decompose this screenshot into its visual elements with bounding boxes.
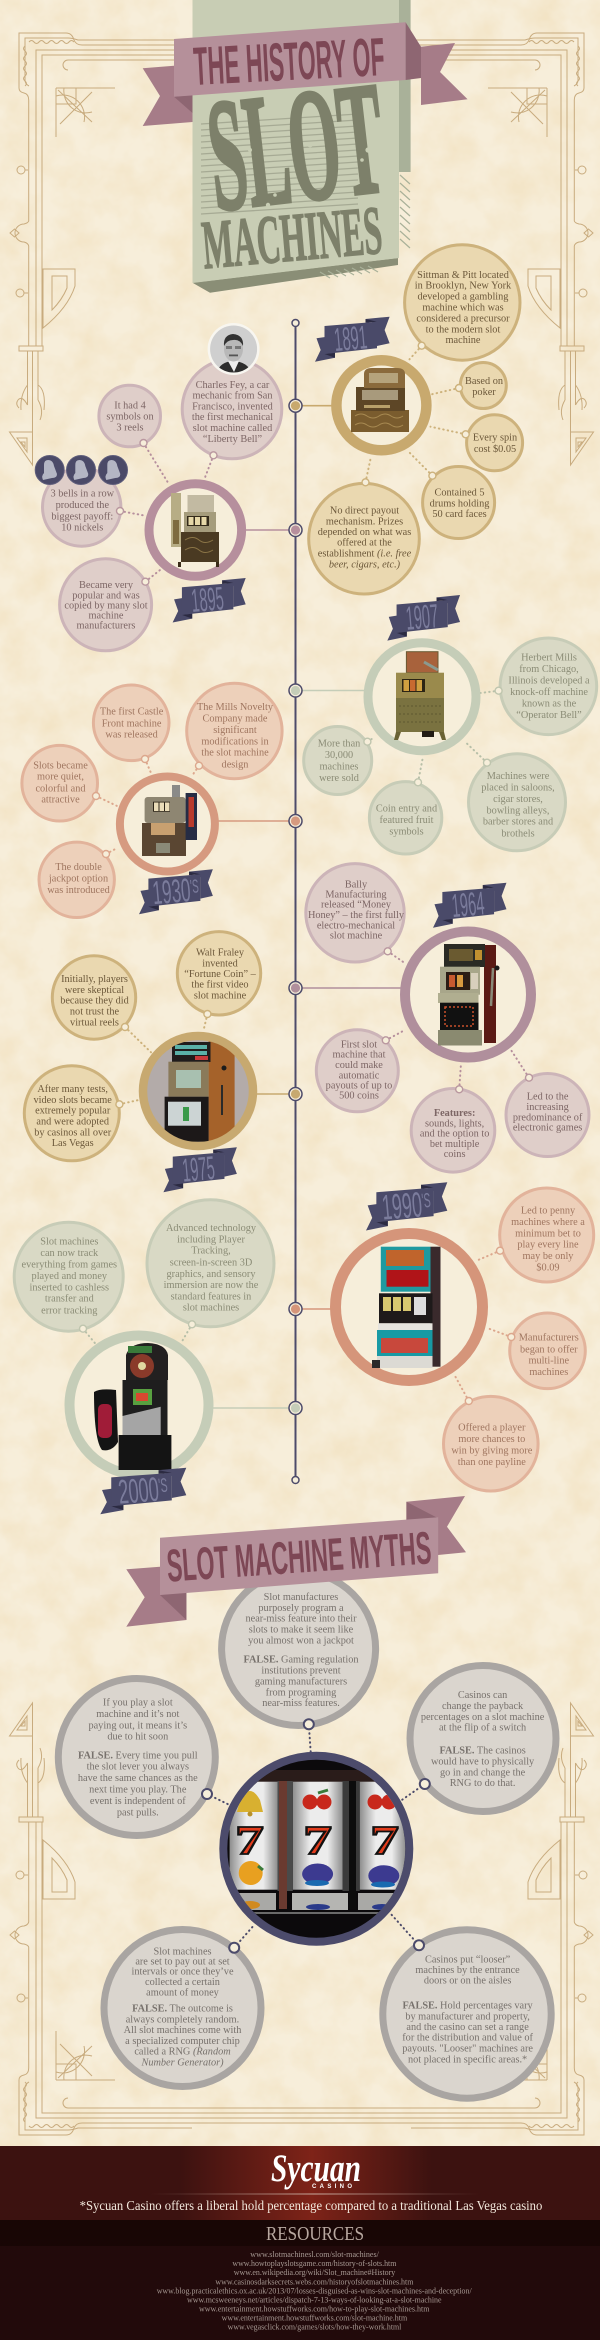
year ribbon 1891: 1891	[332, 318, 369, 358]
text: sevens	[237, 1826, 399, 1855]
bubble: features: sounds, lights,	[425, 1118, 484, 1129]
bubble: three bells: 3 bells in a row	[51, 489, 115, 500]
bubble: advanced technology: graphics, and sensory	[167, 1269, 256, 1280]
bubble: saloons	[465, 742, 566, 851]
bubble: castle front	[93, 685, 169, 773]
era 1930s	[22, 683, 302, 918]
bubble: Mills Novelty: the slot machine	[201, 748, 269, 759]
bubble: coin entry: Coin entry and	[376, 804, 438, 815]
bubble: contained 5 drums: drums holding	[430, 498, 489, 509]
myth bubble: flip of a switch: Casinos can	[458, 1690, 507, 1701]
bubble: Bally: slot machine	[330, 931, 383, 942]
text: sevens: 7	[370, 1818, 399, 1863]
bubble: after many tests: and were adopted	[36, 1117, 110, 1128]
year ribbon 1990s: 'S	[421, 1189, 432, 1213]
bubble: double jackpot	[39, 842, 117, 918]
myth bubble: near-miss: near-miss features.	[262, 1698, 340, 1709]
main ring 1964 with machine	[405, 932, 531, 1058]
myth bubble: flip of a switch: at the flip of a switch	[439, 1723, 527, 1734]
bubble: saloons: brothels	[501, 828, 535, 839]
bubble: more quiet: attractive	[41, 795, 80, 806]
main ring 1990s with machine	[336, 1234, 482, 1380]
bubble: very popular: popular and was	[72, 590, 140, 601]
bubble: Walt Fraley: slot machine	[194, 991, 247, 1002]
bubble: first automatic payouts: automatic	[339, 1070, 380, 1081]
resource list: www.entertainment.howstuffworks.com/slot-machine.htm	[222, 2312, 407, 2322]
bubble: 30,000 machines: 30,000	[325, 750, 353, 761]
bubble: contained 5 drums: Contained 5	[434, 487, 485, 498]
bubble: track everything: can now track	[40, 1248, 99, 1259]
myth bubble: near-miss: Slot manufactures	[264, 1592, 338, 1603]
resource list: www.howtoplayslotsgame.com/history-of-slots.htm	[232, 2258, 397, 2268]
era 1895	[35, 323, 302, 651]
myth bubble: set intervals	[104, 1926, 261, 2086]
logo: Sycuan Casino: Sycuan	[271, 2147, 361, 2190]
main ring 1975 with machine	[143, 1036, 253, 1146]
bubble: penny machines: may be only	[523, 1251, 574, 1262]
bubble: saloons: barber stores and	[483, 817, 554, 828]
bubble: electronic games: increasing	[526, 1102, 569, 1113]
bubble: Bally: Manufacturing	[325, 890, 387, 901]
myth bubble: near-miss: FALSE. Gaming regulation	[243, 1655, 359, 1666]
bubble: penny machines: play every line	[517, 1240, 579, 1251]
bubble: advanced technology: Advanced technology	[166, 1223, 257, 1234]
bubble: saloons: Machines were	[487, 771, 550, 782]
bubble: three bells: 10 nickels	[61, 522, 103, 533]
year ribbon 1990s	[366, 1182, 447, 1230]
bubble: every spin: cost $0.05	[474, 444, 516, 455]
bubble: after many tests: video slots became	[34, 1095, 112, 1106]
resource list: www.slotmachinesl.com/slot-machines/	[250, 2249, 379, 2259]
year ribbon 2000s	[100, 1468, 186, 1514]
portrait: Charles Fey	[208, 323, 260, 376]
main ring 1891 with machine	[336, 360, 426, 450]
bubble: four symbols: symbols on	[106, 412, 154, 423]
footnote: *Sycuan Casino offers a liberal hold percentage compared to a traditional Las Vegas casino	[80, 2199, 542, 2214]
bubble: more quiet: more quiet,	[37, 772, 84, 783]
bubble: double jackpot: jackpot option	[48, 874, 108, 885]
year ribbon 1930s: 'S	[189, 876, 200, 898]
bubble: more quiet	[22, 745, 119, 821]
connector 1907	[289, 684, 366, 697]
footer: sycuan band	[0, 2146, 600, 2220]
myth bubble: flip of a switch: RNG to do that.	[450, 1778, 515, 1789]
bubble: three bells	[42, 468, 145, 546]
connector 1975	[252, 1088, 302, 1100]
bubble: advanced technology: slot machines	[183, 1303, 239, 1314]
bubble: very popular: machine	[89, 611, 124, 622]
bubble: after many tests: Las Vegas	[52, 1138, 94, 1149]
resource list	[157, 2249, 472, 2331]
bubble: 30,000 machines	[304, 726, 375, 794]
bubble: Herbert Mills: “Operator Bell”	[516, 710, 582, 721]
bubble: Charles Fey: the first mechanical	[192, 412, 273, 423]
myth bubble: due to hit: paying out, it means it’s	[88, 1720, 187, 1731]
bubble: Charles Fey: Francisco, invented	[192, 401, 274, 412]
era 1964	[289, 864, 589, 1172]
bubble: very popular: Became very	[79, 580, 134, 591]
bubble: electronic games: Led to the	[527, 1092, 569, 1103]
bubble: no direct payout: No direct payout	[330, 506, 399, 517]
myth bubble: flip of a switch: percentages on a slot machine	[421, 1712, 545, 1723]
myth bubble: set intervals: are set to pay out at set	[135, 1957, 230, 1968]
bubble: penny machines: $0.09	[536, 1262, 560, 1273]
main ring 1930s with machine	[120, 776, 215, 872]
bubble: advanced technology: screen-in-screen 3D	[170, 1257, 253, 1268]
bubble: skeptical	[52, 956, 151, 1052]
bubble: castle front: Front machine	[102, 718, 162, 729]
year ribbon 1964: 1964	[450, 884, 486, 924]
resource list: www.blog.practicalethics.ox.ac.uk/2013/07/losses-disguised-as-wins-slot-machines-and-deception/	[157, 2285, 472, 2295]
bubble: multi-line: Manufacturers	[519, 1333, 579, 1344]
resource list: www.entertainment.howstuffworks.com/how-to-play-slot-machines.htm	[199, 2303, 430, 2313]
bubble: skeptical: Initially, players	[61, 974, 128, 985]
bubble: four symbols	[99, 385, 168, 483]
bubble: features: and the option to	[420, 1129, 489, 1140]
myth bubble: set intervals: a specialized computer chip	[125, 2036, 240, 2047]
year ribbon 1964	[433, 883, 506, 928]
myth bubble: set intervals: Number Generator)	[140, 2057, 224, 2068]
myth bubble: due to hit: due to hit soon	[107, 1732, 168, 1743]
bubble: three bells: produced the	[56, 500, 109, 511]
center image: slot reels	[215, 1756, 420, 1942]
connector 1990s	[289, 1302, 332, 1316]
bubble: after many tests	[24, 1066, 138, 1161]
icons: three bells	[35, 456, 128, 484]
bubble: no direct payout: establishment (i.e. free	[318, 549, 411, 560]
bubble: double jackpot: was introduced	[47, 885, 111, 896]
bubble: first automatic payouts	[316, 1030, 405, 1112]
bubble: first automatic payouts: could make	[335, 1060, 383, 1071]
myth bubble: due to hit: next time you play. The	[89, 1784, 187, 1795]
year ribbon 2000s: 2000	[116, 1466, 205, 1511]
myth bubble: near-miss	[222, 1572, 376, 1752]
bubble: based on poker: Based on	[465, 376, 503, 387]
bubble: multi-line: machines	[529, 1367, 568, 1378]
bubble: no direct payout: mechanism. Prizes	[326, 516, 403, 527]
year ribbon 1891	[315, 317, 390, 362]
bubble: more chances: than one payline	[458, 1457, 526, 1468]
bubble: Charles Fey: Charles Fey, a car	[196, 380, 270, 391]
myth bubble: set intervals: intervals or once they’ve	[131, 1967, 234, 1978]
bubble: electronic games: predominance of	[513, 1112, 583, 1123]
bubble: Herbert Mills	[480, 638, 597, 735]
bubble: Sittman & Pitt: considered a precursor	[416, 314, 510, 325]
myth bubble: flip of a switch: change the payback	[442, 1701, 524, 1712]
myth bubble: set intervals: always completely random.	[126, 2014, 239, 2025]
bubble: very popular: manufacturers	[77, 621, 135, 632]
bubble: advanced technology: immersion are now the	[164, 1280, 259, 1291]
bubble: no direct payout: offered at the	[337, 538, 392, 549]
myth bubble: due to hit: event is independent of	[90, 1796, 186, 1807]
myth bubble: looser machines: payouts. "Looser" machines are	[402, 2044, 533, 2055]
myth bubble: set intervals: collected a certain	[145, 1977, 220, 1988]
myth bubble: set intervals: amount of money	[146, 1987, 220, 1998]
bubble: Mills Novelty: significant	[213, 725, 257, 736]
bubble: track everything: played and money	[32, 1271, 108, 1282]
bubble: Walt Fraley	[177, 932, 261, 1030]
bubble: track everything: transfer and	[45, 1294, 95, 1305]
myths ribbon heading	[126, 1496, 466, 1627]
myth bubble: set intervals: Slot machines	[153, 1946, 212, 1957]
bubble: more quiet: Slots became	[33, 760, 88, 771]
era 1990s	[289, 1182, 594, 1491]
title block	[192, 0, 411, 293]
bubble: track everything: error tracking	[41, 1305, 97, 1316]
connector 2000s	[210, 1402, 302, 1414]
bubble: contained 5 drums	[408, 451, 495, 538]
year ribbon 1907	[387, 595, 460, 641]
bubble: Herbert Mills: Herbert Mills	[521, 653, 577, 664]
bubble: Sittman & Pitt: developed a gambling	[418, 292, 508, 303]
bubble: multi-line: multi-line	[528, 1356, 570, 1367]
myth bubble: near-miss: near-miss feature into their	[245, 1614, 357, 1625]
bubble: Bally: Bally	[345, 880, 368, 891]
bubble: coin entry: symbols	[389, 827, 424, 838]
bubble: saloons: placed in saloons,	[481, 783, 555, 794]
bubble: Bally: released “Money	[321, 900, 392, 911]
era 1891	[289, 245, 523, 594]
bubble: more chances: win by giving more	[451, 1446, 533, 1457]
bubble: no direct payout: depended on what was	[318, 527, 411, 538]
year ribbon 1930s: 1930	[151, 868, 226, 911]
era 1975	[24, 932, 302, 1192]
myth bubble: due to hit	[58, 1678, 230, 1836]
resource list: www.en.wikipedia.org/wiki/Slot_machine#History	[234, 2267, 396, 2277]
connector 1930s	[215, 814, 302, 828]
text: sevens: 7	[235, 1818, 264, 1863]
myth bubble: looser machines: doors or on the aisles	[424, 1975, 511, 1986]
bubble: saloons: cigar stores,	[493, 794, 543, 805]
bubble: Walt Fraley: the first video	[191, 980, 249, 991]
myth bubble: due to hit: the slot lever you always	[87, 1762, 189, 1773]
bubble: after many tests: After many tests,	[37, 1084, 108, 1095]
myth bubble: looser machines: FALSE. Hold percentages vary	[402, 2001, 533, 2012]
bubble: Mills Novelty: The Mills Novelty	[197, 702, 274, 713]
myth bubble: due to hit: If you play a slot	[103, 1698, 173, 1709]
bubble: Charles Fey: mechanic from San	[192, 391, 273, 402]
bubble: first automatic payouts: payouts of up to	[326, 1081, 392, 1092]
resource list: www.mcsweeneys.net/articles/dispatch-7-13-ways-of-looking-at-a-slot-machine	[187, 2294, 442, 2304]
myth bubble: near-miss: purposely program a	[258, 1603, 344, 1614]
bubble: Sittman & Pitt: Sittman & Pitt located	[417, 270, 510, 281]
bubble: Charles Fey: slot machine called	[193, 423, 273, 434]
bubble: four symbols: It had 4	[114, 401, 146, 412]
year ribbon 2000s: 'S	[157, 1475, 169, 1497]
bubble: after many tests: by casinos all over	[34, 1127, 112, 1138]
bubble: more chances: Offered a player	[458, 1423, 526, 1434]
main ring 2000s with machine	[70, 1336, 208, 1474]
bubble: Charles Fey	[182, 359, 282, 478]
myth bubble: near-miss: from programing	[266, 1687, 336, 1698]
main ring 1895 with machine	[149, 484, 242, 576]
year ribbon 1990s: 1990	[380, 1181, 463, 1228]
myth bubble: due to hit: past pulls.	[117, 1808, 159, 1819]
heading: resources: RESOURCES	[266, 2223, 364, 2245]
bubble: first automatic payouts: First slot	[341, 1039, 377, 1050]
era 1907	[289, 595, 597, 854]
myth bubble: looser machines: by manufacturer and property,	[405, 2011, 530, 2022]
bubble: Mills Novelty: design	[222, 759, 248, 770]
bubble: track everything: inserted to cashless	[30, 1282, 109, 1293]
bubble: every spin: Every spin	[473, 432, 517, 443]
myth bubble: looser machines	[383, 1913, 551, 2098]
bubble: penny machines: Led to penny	[521, 1206, 576, 1217]
resource list: www.casinosdarksecrets.webs.com/historyofslotmachines.htm	[215, 2276, 414, 2286]
era 2000s	[14, 1200, 302, 1514]
bubble: advanced technology: Tracking,	[191, 1246, 231, 1257]
year ribbon 1975: 1975	[181, 1149, 216, 1189]
bubble: Mills Novelty	[187, 683, 282, 779]
bubble: track everything: Slot machines	[40, 1237, 98, 1248]
myth bubble: due to hit: FALSE. Every time you pull	[78, 1750, 198, 1761]
myth bubble: near-miss: gaming manufacturers	[255, 1677, 347, 1688]
bubble: track everything: everything from games	[22, 1260, 117, 1271]
myth bubble: near-miss: slots to make it seem like	[249, 1625, 354, 1636]
bubble: based on poker: poker	[472, 387, 496, 398]
myth bubble: due to hit: have the same chances as the	[78, 1773, 198, 1784]
myth bubble: flip of a switch	[402, 1666, 556, 1812]
bubble: three bells: biggest payoff:	[51, 512, 113, 523]
bubble: Sittman & Pitt	[405, 245, 520, 360]
bubble: based on poker	[432, 362, 506, 408]
bubble: Sittman & Pitt: machine which was	[422, 302, 504, 313]
bubble: electronic games	[506, 1050, 589, 1156]
myth bubble: looser machines: and the casino can set a range	[406, 2022, 529, 2033]
bubble: castle front: was released	[105, 730, 159, 741]
bubble: coin entry: featured fruit	[379, 815, 434, 826]
bubble: very popular: copied by many slot	[64, 600, 148, 611]
bubble: Walt Fraley: “Fortune Coin” –	[184, 969, 257, 980]
myth bubble: set intervals: called a RNG (Random	[134, 2047, 231, 2058]
myth bubble: set intervals: All slot machines come with	[124, 2025, 242, 2036]
bubble: features	[411, 1063, 495, 1172]
bubble: Mills Novelty: Company made	[203, 714, 268, 725]
bubble: 30,000 machines: were sold	[319, 773, 360, 784]
bubble: four symbols: 3 reels	[116, 422, 144, 433]
bubble: castle front: The first Castle	[100, 707, 164, 718]
bubble: first automatic payouts: machine that	[333, 1050, 386, 1061]
bubble: coin entry	[369, 757, 442, 854]
bubble: skeptical: virtual reels	[70, 1017, 119, 1028]
bubble: more chances	[444, 1377, 538, 1491]
bubble: multi-line: began to offer	[520, 1344, 578, 1355]
bubble: more quiet: colorful and	[35, 783, 86, 794]
bubble: features: bet multiple	[430, 1139, 480, 1150]
timeline axis	[292, 320, 299, 1484]
myth bubble: near-miss: institutions prevent	[261, 1665, 341, 1676]
bubble: skeptical: were skeptical	[65, 985, 124, 996]
bubble: double jackpot: The double	[55, 862, 102, 873]
main ring 1907 with machine	[368, 643, 476, 751]
title block: MACHINES	[199, 192, 385, 283]
bubble: every spin	[430, 415, 523, 471]
connector 1964	[289, 982, 402, 994]
bubble: electronic games: electronic games	[513, 1123, 582, 1134]
bubble: Herbert Mills: Illinois developed a	[508, 676, 590, 687]
bubble: Herbert Mills: from Chicago,	[519, 664, 579, 675]
myth bubble: looser machines: machines by the entrance	[415, 1965, 520, 1976]
bubble: advanced technology: including Player	[177, 1234, 245, 1245]
text: sevens: 7	[303, 1818, 332, 1863]
bubble: 30,000 machines: machines	[320, 762, 358, 773]
title ribbon	[143, 22, 468, 126]
bubble: Sittman & Pitt: machine	[446, 335, 481, 346]
connector 1891	[289, 399, 335, 412]
bubble: very popular	[60, 559, 160, 651]
myth bubble: flip of a switch: FALSE. The casinos	[439, 1745, 526, 1756]
bubble: Sittman & Pitt: to the modern slot	[426, 324, 500, 335]
bubble: track everything	[14, 1222, 123, 1344]
bubble: multi-line	[488, 1313, 585, 1389]
year ribbon 1895	[173, 578, 246, 623]
bubble: Sittman & Pitt: in Brooklyn, New York	[415, 281, 512, 292]
bubble: no direct payout	[309, 457, 419, 594]
bubble: saloons: bowling alleys,	[487, 806, 549, 817]
bubble: Herbert Mills: knock-off machine	[510, 687, 588, 698]
bubble: after many tests: extremely popular	[35, 1106, 111, 1117]
footer: resources	[0, 2220, 600, 2340]
bubble: no direct payout: beer, cigars, etc.)	[329, 559, 401, 570]
year ribbon 1895: 1895	[190, 580, 225, 619]
myth bubble: looser machines: for the distribution and value of	[402, 2033, 534, 2044]
bubble: advanced technology	[147, 1200, 274, 1342]
bubble: features: coins	[444, 1149, 465, 1160]
bubble: penny machines: minimum bet to	[515, 1228, 581, 1239]
bubble: Bally: Honey” – the first fully	[308, 910, 405, 921]
bubble: 30,000 machines: More than	[318, 739, 360, 750]
bubble: skeptical: not trust the	[70, 1007, 120, 1018]
myth bubble: due to hit: machine and it’s not	[96, 1709, 180, 1720]
bubble: advanced technology: standard features in	[171, 1292, 251, 1303]
myth bubble: near-miss: you almost won a jackpot	[248, 1636, 354, 1647]
bubble: contained 5 drums: 50 card faces	[432, 509, 487, 520]
myth bubble: flip of a switch: would have to physically	[431, 1756, 535, 1767]
bubble: more chances: more chances to	[458, 1434, 525, 1445]
bubble: Walt Fraley: Walt Fraley	[196, 947, 245, 958]
logo: Sycuan Casino: CASINO	[312, 2184, 352, 2190]
myth bubble: looser machines: Casinos put “looser”	[425, 1955, 511, 1966]
bubble: Herbert Mills: known as the	[522, 699, 577, 710]
myth bubble: looser machines: not placed in specific areas.*	[408, 2055, 527, 2066]
resource list: www.vegasclick.com/games/slots/how-they-work.html	[228, 2321, 402, 2331]
bubble: Bally	[306, 864, 405, 962]
year ribbon 1907: 1907	[404, 597, 440, 637]
bubble: Walt Fraley: invented	[202, 958, 239, 969]
bubble: Mills Novelty: modifications in	[201, 736, 269, 747]
year ribbon 1930s	[139, 869, 213, 914]
myth bubble: set intervals: FALSE. The outcome is	[132, 2004, 233, 2015]
bubble: Bally: electro-mechanical	[317, 920, 395, 931]
bubble: first automatic payouts: 500 coins	[339, 1091, 379, 1102]
bubble: features: Features:	[434, 1108, 475, 1119]
bubble: skeptical: because they did	[60, 996, 130, 1007]
myth bubble: flip of a switch: go in and change the	[440, 1767, 526, 1778]
bubble: penny machines: machines where a	[511, 1217, 585, 1228]
year ribbon 1975	[163, 1147, 237, 1192]
bubble: Charles Fey: “Liberty Bell”	[203, 434, 263, 445]
bubble: penny machines	[476, 1188, 594, 1282]
connector 1895	[242, 524, 302, 536]
